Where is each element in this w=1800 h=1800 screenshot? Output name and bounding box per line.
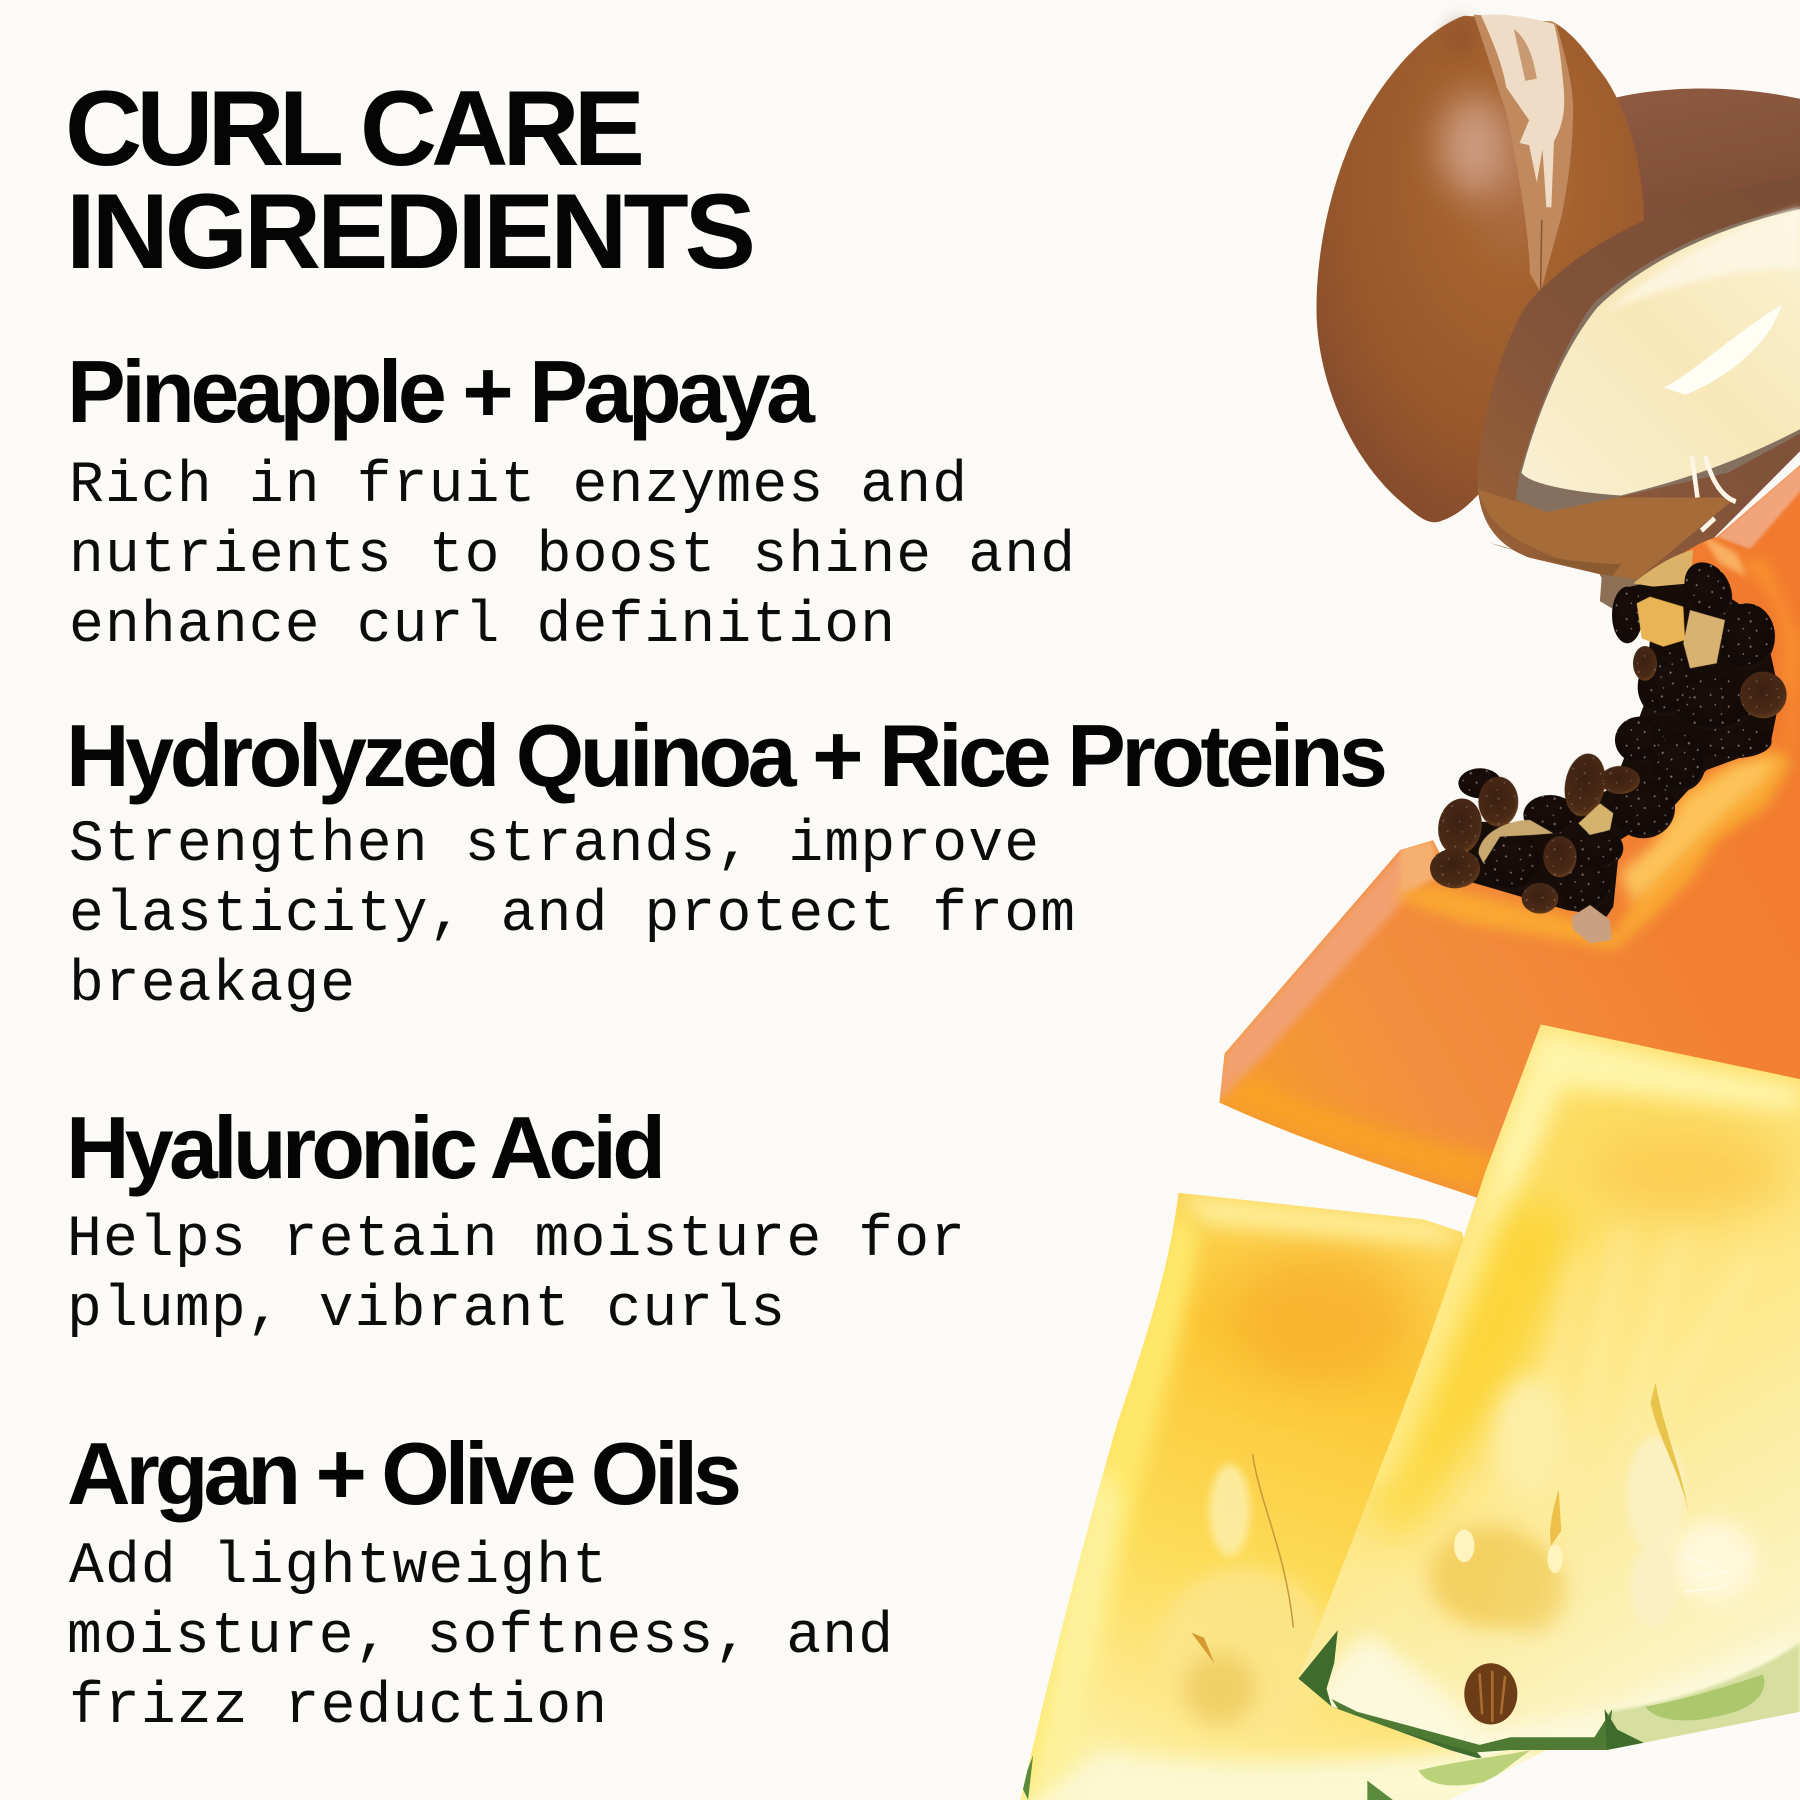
title: CURL CARE (65, 68, 645, 188)
title (65, 68, 756, 291)
description: Hyaluronic Acid (67, 1208, 965, 1343)
description: Pineapple + Papaya: enhance curl definition (69, 594, 895, 659)
description: Pineapple + Papaya: Rich in fruit enzymes and (69, 454, 967, 519)
description: Hydrolyzed Quinoa + Rice Proteins: breakage (69, 953, 355, 1018)
panel: Argan + Olive Oils (67, 1424, 893, 1740)
heading: Pineapple + Papaya: Pineapple + Papaya (67, 342, 816, 441)
description: Argan + Olive Oils: moisture, softness, and (67, 1605, 893, 1670)
panel: Hyaluronic Acid (66, 1098, 965, 1343)
description: Hyaluronic Acid: plump, vibrant curls (67, 1278, 785, 1343)
description: Argan + Olive Oils (67, 1535, 893, 1740)
panel: Hydrolyzed Quinoa + Rice Proteins (66, 706, 1388, 1018)
description: Hyaluronic Acid: Helps retain moisture for (67, 1208, 965, 1273)
description: Hydrolyzed Quinoa + Rice Proteins (69, 813, 1075, 1018)
left pineapple wedge (1020, 1192, 1546, 1800)
image: papaya slice with seeds (1214, 451, 1800, 1199)
title: INGREDIENTS (66, 171, 756, 291)
back argan nut (1583, 88, 1800, 257)
heading: Argan + Olive Oils: Argan + Olive Oils (67, 1424, 742, 1523)
description: Hydrolyzed Quinoa + Rice Proteins: elasticity, and protect from (69, 883, 1075, 948)
heading: Hyaluronic Acid: Hyaluronic Acid (66, 1098, 666, 1197)
image: argan nuts (1317, 15, 1800, 612)
right pineapple wedge (1298, 1024, 1800, 1759)
papaya flesh (1214, 451, 1800, 1199)
description: Pineapple + Papaya: nutrients to boost shine and (69, 524, 1075, 589)
description: Hydrolyzed Quinoa + Rice Proteins: Strengthen strands, improve (69, 813, 1039, 878)
image: pineapple wedges (1000, 1000, 1800, 1800)
description: Argan + Olive Oils: Add lightweight (69, 1535, 607, 1600)
pineapple eye (1464, 1663, 1517, 1724)
seed pulp pieces (1478, 597, 1725, 943)
whole argan nut (1317, 15, 1644, 522)
description: Argan + Olive Oils: frizz reduction (69, 1675, 607, 1740)
heading: Hydrolyzed Quinoa + Rice Proteins: Hydrolyzed Quinoa + Rice Proteins (66, 706, 1388, 805)
halved argan nut with kernel (1477, 174, 1800, 612)
panel: Pineapple + Papaya (67, 342, 1075, 659)
papaya seeds (1430, 550, 1787, 943)
description: Pineapple + Papaya (69, 454, 1075, 659)
